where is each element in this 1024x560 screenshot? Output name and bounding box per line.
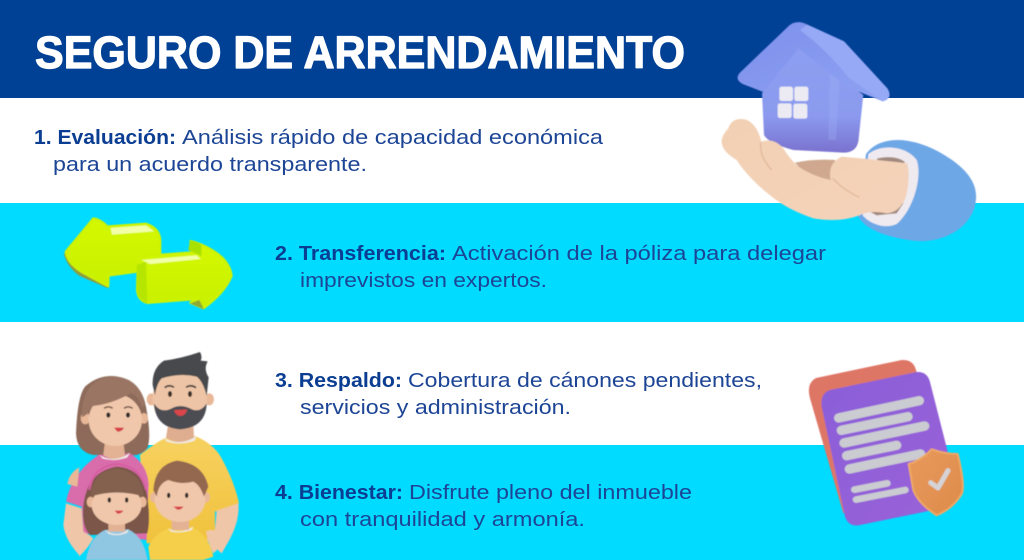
father hair (153, 352, 209, 396)
text block: step 3: servicios y administración. (300, 396, 571, 419)
father neck (166, 423, 194, 442)
text block: step 3 (275, 369, 762, 419)
mother hair back (76, 376, 149, 455)
girl headband (89, 464, 146, 490)
house roof (738, 22, 889, 101)
boy head (155, 477, 205, 522)
girl face (108, 497, 128, 503)
father beard (154, 403, 207, 429)
house body (762, 47, 863, 153)
house body highlight (828, 68, 840, 140)
mother head (89, 394, 142, 446)
light blue band: step 2 (0, 203, 1024, 322)
father head (153, 368, 207, 429)
icon: hand holding house (722, 22, 976, 241)
palm shadow (795, 160, 842, 187)
text block: step 1 (34, 126, 604, 176)
text block: step 2: Activación de la póliza para delegar (452, 242, 826, 265)
left arrow side (65, 253, 108, 287)
father ears (147, 393, 156, 405)
text block: step 1: Análisis rápido de capacidad económica (182, 126, 604, 149)
mother face (106, 412, 130, 418)
girl fringe (91, 468, 144, 497)
roof right slope (800, 25, 889, 101)
boy face (167, 493, 188, 498)
boy hair (153, 461, 208, 497)
girl hair back (83, 467, 149, 535)
mother hand (75, 535, 93, 556)
shield (909, 449, 963, 515)
title: SEGURO DE ARRENDAMIENTO (35, 27, 685, 78)
text block: step 4: con tranquilidad y armonía. (300, 508, 585, 531)
icon: exchange arrows (65, 219, 231, 309)
text block: step 4 (275, 481, 692, 531)
hand (722, 119, 909, 220)
girl shirt (86, 529, 147, 560)
father arm (207, 503, 239, 553)
left arrow (66, 219, 160, 286)
text block: step 4: Disfrute pleno del inmueble (409, 481, 692, 504)
mother shirt (66, 453, 149, 540)
right arrow (137, 241, 231, 308)
father hand (206, 530, 224, 553)
text block: step 2: imprevistos en expertos. (300, 269, 547, 292)
boy shirt (148, 527, 213, 560)
father face (168, 391, 192, 397)
finger crease (761, 143, 859, 197)
house window (778, 87, 808, 119)
shirt cuff (863, 147, 918, 226)
back sheet (809, 360, 943, 513)
mother hair top (82, 376, 145, 417)
document lines (839, 401, 925, 500)
father shirt (140, 436, 239, 543)
text block: step 4: 4. Bienestar: (275, 481, 403, 504)
mother arm (63, 503, 92, 556)
girl neck (108, 520, 125, 532)
text block: step 3: 3. Respaldo: (275, 369, 402, 392)
text block: step 1: 1. Evaluación: (34, 126, 176, 149)
shield check mark (931, 471, 948, 488)
header band (0, 0, 1024, 98)
light blue band: step 4 (0, 445, 1024, 560)
inner cuff shadow (867, 157, 905, 215)
text block: step 3: Cobertura de cánones pendientes, (408, 369, 762, 392)
sleeve (858, 140, 976, 241)
icon: family (63, 352, 239, 560)
girl head (92, 485, 142, 525)
front sheet (821, 372, 959, 525)
text block: step 2: 2. Transferencia: (275, 242, 446, 265)
boy neck (172, 518, 189, 530)
text block: step 1: para un acuerdo transparente. (53, 153, 367, 176)
text block: step 2 (275, 242, 826, 292)
mother neck (103, 442, 125, 459)
icon: document with shield (809, 360, 963, 525)
